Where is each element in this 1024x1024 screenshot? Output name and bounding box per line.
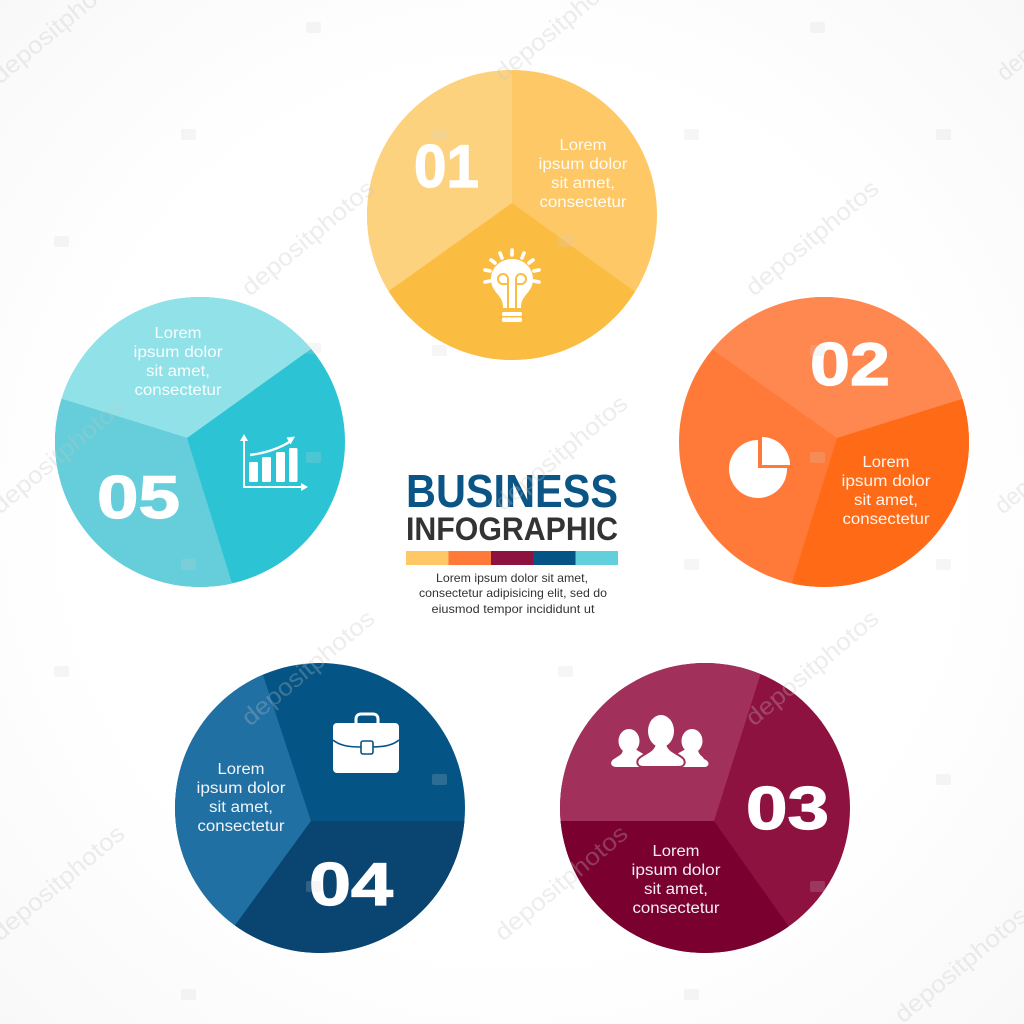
panel: step 04 blue circle [175,663,465,953]
watermarks: depositphotos [490,390,633,517]
icon: rising bar chart [240,434,308,491]
icon: light bulb [485,250,539,322]
text: step 02 description: Lorem [862,454,910,471]
text: step 03 description: consectetur [632,900,720,917]
icon: group of people [611,715,709,767]
text: step 04 description: consectetur [198,818,284,835]
panel: step 01 yellow circle [367,70,657,360]
panel: step 03 maroon circle [560,663,850,953]
title block [406,465,618,616]
panel: step 05 teal circle [55,297,345,587]
subtitle paragraph [419,571,607,616]
subtitle paragraph: consectetur adipisicing elit, sed do [419,586,607,600]
text: step 02 description: consectetur [842,511,930,528]
icon: pie chart [729,437,790,498]
text: step 03 description: ipsum dolor [632,862,720,879]
text: step 01 description: sit amet, [551,175,615,192]
text: step 01 description: Lorem [560,137,606,154]
heading: BUSINESS: BUSINESS [406,465,618,517]
text: step 05 description: Lorem [154,325,202,342]
watermarks: depositphotos [490,820,633,947]
number 05: 05 [97,464,180,531]
watermarks: depositphotos [741,605,884,732]
text: step 04 description: sit amet, [209,799,273,816]
text: step 04 description: ipsum dolor [196,780,286,797]
text: step 05 description: sit amet, [146,363,210,380]
text: step 03 description: Lorem [652,843,700,860]
subtitle paragraph: Lorem ipsum dolor sit amet, [436,571,588,585]
watermarks: depositphotos [237,605,380,732]
text: step 03 description [632,843,720,917]
text: step 01 description: ipsum dolor [538,156,628,173]
watermarks: depositphotos [237,175,380,302]
text: step 02 description: ipsum dolor [842,473,930,490]
text: step 01 description [538,137,628,211]
text: step 04 description [196,761,286,835]
number 03: 03 [746,775,829,842]
text: step 04 description: Lorem [218,761,264,778]
text: step 01 description: consectetur [540,194,626,211]
text: step 03 description: sit amet, [644,881,708,898]
number 01: 01 [414,133,479,200]
subtitle paragraph: eiusmod tempor incididunt ut [432,602,595,616]
watermarks: depositphotos [741,175,884,302]
text: step 02 description [842,454,930,528]
heading: INFOGRAPHIC: INFOGRAPHIC [406,511,618,547]
icon: briefcase [333,714,399,773]
text: step 02 description: sit amet, [854,492,918,509]
panel: step 02 orange circle [679,297,969,587]
colour legend bar [406,551,618,565]
text: step 05 description: consectetur [134,382,222,399]
text: step 05 description: ipsum dolor [134,344,222,361]
text: step 05 description [134,325,222,399]
number 02: 02 [810,331,890,398]
number 04: 04 [309,851,394,918]
